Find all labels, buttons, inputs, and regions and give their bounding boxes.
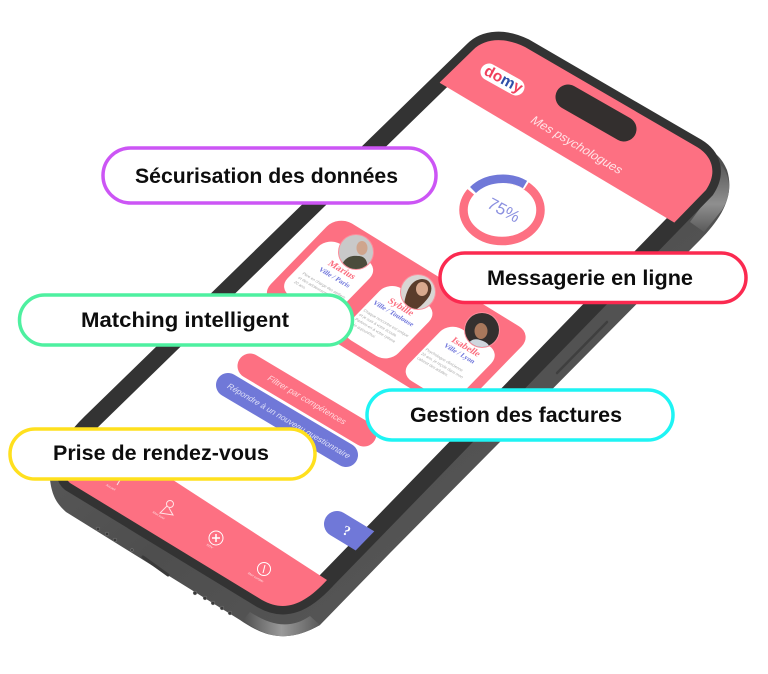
screen content <box>68 40 712 606</box>
filter button <box>250 366 364 434</box>
card: Marius: 20 ans. <box>293 280 308 290</box>
label: Matching intelligent: Matching intelligent <box>81 309 289 332</box>
progress ring: 75% <box>484 194 524 226</box>
card: Sybille: Ville / Toulouse <box>371 299 416 328</box>
card: Marius: Père en charge des ateliers <box>301 271 347 299</box>
label: Gestion des factures <box>367 390 673 440</box>
phone metal body <box>50 90 729 636</box>
phone screen and bezel <box>65 40 712 606</box>
footer icon: partly hidden item <box>105 480 120 491</box>
card: Sybille <box>348 274 436 358</box>
footer icon: add <box>205 531 223 550</box>
label: Prise de rendez-vous: Prise de rendez-vous <box>53 442 269 465</box>
top right corner highlight <box>690 162 729 232</box>
questionnaire button: Répondre à un nouveau questionnaire <box>225 382 354 460</box>
card: Isabelle: Ville / Lyon <box>442 342 477 365</box>
side button <box>557 322 607 373</box>
logo: domy <box>481 63 526 97</box>
card: Sybille: dès aujourd'hui. <box>350 321 377 339</box>
filter button: Filtrer par compétences <box>265 374 349 426</box>
card: Marius: et des adolescents depuis <box>297 275 340 302</box>
footer icon: add: RDV <box>205 543 215 550</box>
phone <box>50 32 730 636</box>
label: Prise de rendez-vous <box>10 429 315 479</box>
card: Isabelle: Isabelle <box>448 336 482 359</box>
card: Sybille: Chaque rencontre est unique <box>362 308 411 338</box>
card: Marius: Ville / Paris <box>317 266 352 289</box>
footer icon: account <box>247 562 270 583</box>
card: Marius <box>284 234 374 302</box>
label: Messagerie en ligne <box>440 253 746 302</box>
card: Sybille: et je suis à votre écoute. <box>358 312 399 338</box>
card: Isabelle: cabinet des adultes. <box>416 356 450 377</box>
speaker holes and charging port <box>96 527 232 615</box>
label: Messagerie en ligne: Messagerie en ligne <box>487 267 693 290</box>
screen title: Mes psychologues <box>527 114 626 176</box>
footer icon: profile <box>152 500 174 520</box>
label: Matching intelligent <box>20 295 352 345</box>
progress ring <box>464 178 540 241</box>
help button <box>337 524 395 559</box>
footer icon: profile: Mon suivi <box>152 510 166 520</box>
card: Isabelle <box>406 312 500 388</box>
notch <box>568 97 624 129</box>
footer icon: account: Mon compte <box>247 571 265 583</box>
label: Sécurisation des données: Sécurisation des données <box>135 165 398 188</box>
card: Marius: Marius <box>325 259 358 282</box>
card: Sybille: Parlons-en à votre rythme <box>354 317 398 344</box>
card: Sybille: Sybille <box>385 297 416 318</box>
footer icon: partly hidden item: Accueil <box>105 483 117 491</box>
card: Isabelle: Psychologue clinicienne <box>424 347 465 373</box>
label: Gestion des factures: Gestion des factures <box>410 404 622 427</box>
label: Sécurisation des données <box>103 148 436 203</box>
footer band <box>68 480 327 606</box>
psychologist cards panel <box>266 220 526 388</box>
header band <box>440 40 712 223</box>
card: Isabelle: 20 ans, je reçois dans mon <box>420 351 465 379</box>
bottom corner highlight <box>243 612 320 636</box>
help question mark: ? <box>340 523 352 540</box>
